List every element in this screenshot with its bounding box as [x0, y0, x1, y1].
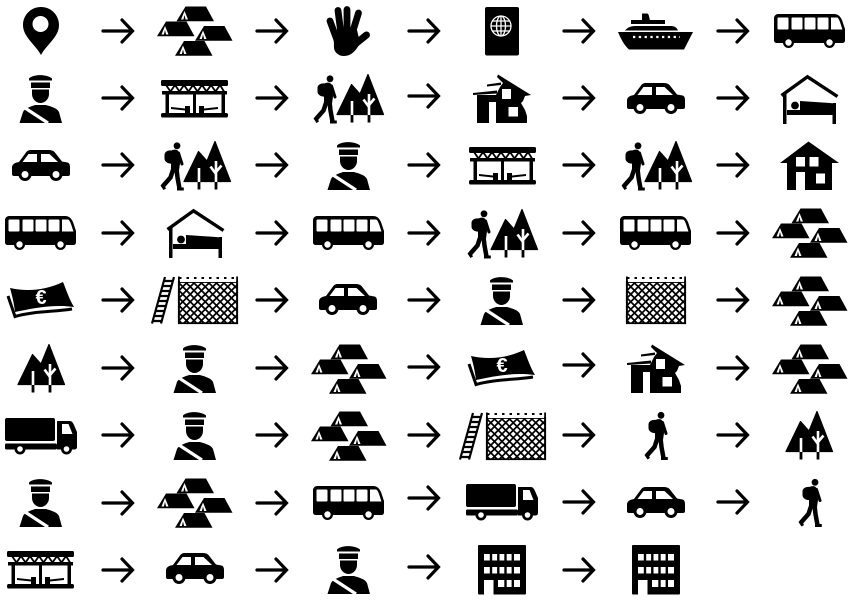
arrow: [718, 424, 748, 446]
icon: bus: [313, 486, 384, 520]
icon: walker: [798, 479, 822, 527]
icon: ruined house: [627, 344, 685, 393]
row 4: [5, 208, 848, 258]
icon: tents: [157, 478, 232, 528]
row 9: [7, 545, 680, 594]
icon: officer: [174, 412, 216, 460]
icon: euro banknotes: [8, 282, 74, 316]
arrow: [103, 20, 132, 42]
icon: forest: [18, 344, 64, 392]
arrow: [718, 357, 748, 379]
icon: border station: [469, 147, 536, 184]
icon: bus: [774, 14, 845, 48]
icon: officer: [480, 277, 523, 325]
arrow: [257, 154, 286, 176]
icon: tents: [772, 208, 848, 258]
arrow: [103, 87, 132, 109]
arrow: [409, 356, 438, 378]
icon: forest: [786, 412, 832, 460]
arrow: [409, 289, 438, 311]
arrow: [103, 222, 132, 244]
icon: border station: [161, 80, 228, 118]
icon: officer: [20, 75, 62, 123]
icon: walker in forest: [468, 210, 538, 258]
arrow: [564, 491, 594, 513]
icon: officer: [174, 345, 216, 393]
icon: walker in forest: [622, 142, 692, 190]
icon: ladder and fence: [152, 276, 238, 324]
arrow: [409, 85, 438, 107]
arrow: [718, 154, 748, 176]
icon: car: [319, 284, 377, 315]
icon: tents: [772, 276, 848, 326]
icon: map pin: [23, 7, 59, 55]
icon: officer: [20, 479, 62, 527]
icon: tents: [311, 344, 386, 394]
icon: car: [12, 150, 70, 181]
icon: bus: [5, 216, 76, 250]
icon: tents: [157, 6, 232, 56]
icon: shelter with bed: [168, 211, 224, 258]
icon: euro banknotes: [469, 350, 535, 384]
icon: car: [627, 487, 685, 518]
icon: tents: [772, 344, 848, 394]
arrow: [409, 222, 438, 244]
row 2: [20, 74, 838, 124]
arrow: [564, 559, 594, 581]
arrow: [257, 492, 286, 514]
icon: fence: [626, 276, 686, 324]
icon: bus: [313, 216, 384, 250]
icon: bus: [620, 216, 691, 250]
arrow: [103, 559, 132, 581]
arrow: [564, 87, 594, 109]
arrow: [103, 492, 132, 514]
arrow: [257, 559, 286, 581]
arrow: [564, 20, 594, 42]
arrow: [257, 20, 286, 42]
icon: office building: [478, 545, 526, 594]
icon: car: [166, 553, 224, 584]
arrow: [718, 20, 748, 42]
arrow: [257, 87, 286, 109]
icon: tents: [311, 412, 386, 461]
icon: truck: [466, 484, 538, 520]
row 6: [18, 344, 848, 394]
arrow: [564, 424, 594, 446]
arrow: [718, 87, 748, 109]
icon: walker in forest: [314, 74, 384, 124]
arrow: [103, 424, 132, 446]
row 1: [23, 6, 845, 56]
arrow: [409, 556, 438, 578]
arrow: [718, 222, 748, 244]
arrow: [409, 20, 438, 42]
arrow: [718, 491, 748, 513]
icon: officer: [328, 142, 370, 190]
icon: truck: [5, 418, 77, 454]
arrow: [257, 222, 286, 244]
arrow: [564, 289, 594, 311]
arrow: [564, 222, 594, 244]
icon: walker in forest: [160, 142, 230, 190]
icon: ladder and fence: [460, 412, 546, 460]
row 7: [5, 412, 832, 461]
icon: border station: [7, 551, 74, 588]
arrow: [103, 154, 132, 176]
arrow: [564, 154, 594, 176]
row 5: [8, 276, 848, 326]
arrow: [257, 357, 286, 379]
arrow: [409, 154, 438, 176]
arrow: [409, 487, 438, 509]
arrow: [564, 354, 594, 376]
arrow: [409, 424, 438, 446]
icon: officer: [328, 546, 370, 594]
icon: ship: [618, 14, 693, 50]
arrow: [103, 289, 132, 311]
icon: house: [780, 142, 839, 190]
icon: ruined house: [473, 74, 531, 123]
arrow: [257, 289, 286, 311]
icon: walker: [644, 412, 668, 460]
row 8: [20, 478, 822, 528]
icon: shelter with bed: [782, 77, 838, 124]
arrow: [257, 424, 286, 446]
arrow: [718, 289, 748, 311]
icon: car: [627, 83, 685, 114]
icon: passport: [485, 7, 519, 56]
arrow: [103, 357, 132, 379]
icon: hand: [330, 10, 366, 56]
row 3: [12, 142, 839, 190]
icon: office building: [632, 545, 680, 594]
